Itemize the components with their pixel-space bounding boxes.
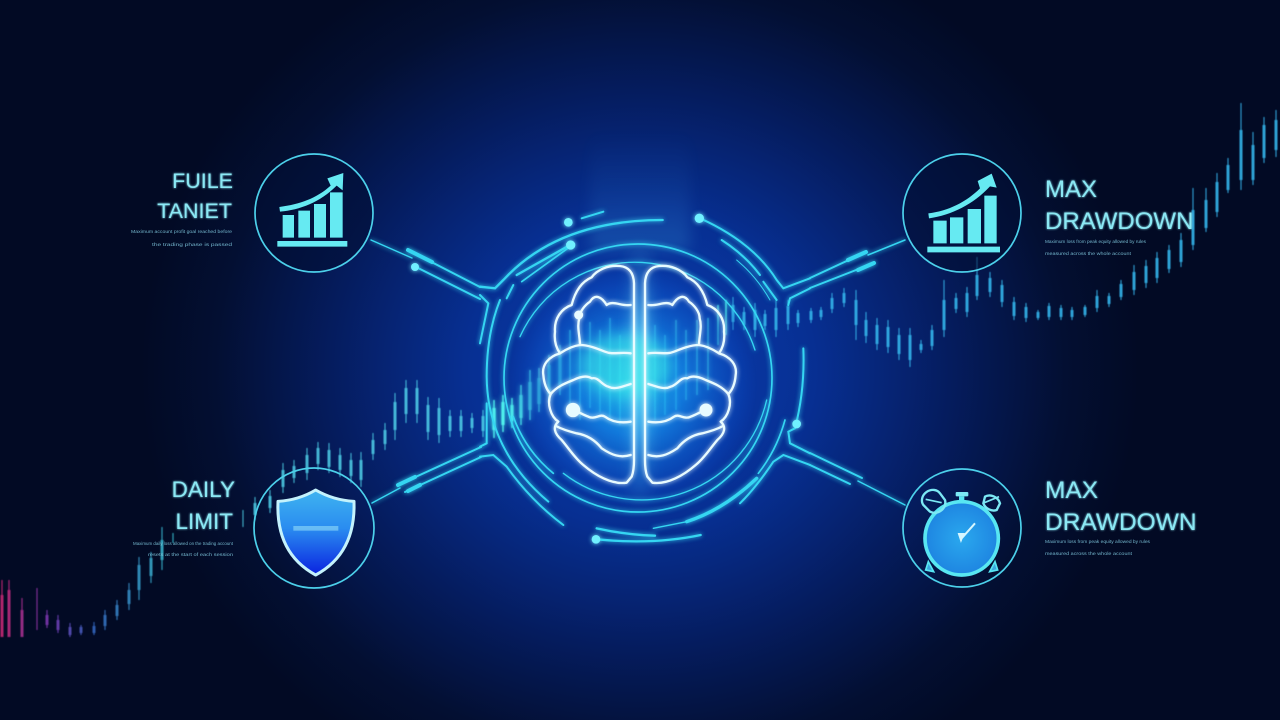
description lines: Maximum account profit goal reached before [131, 229, 232, 234]
icon ring [903, 154, 1021, 272]
ring arc lower [563, 400, 767, 500]
right side arc [788, 288, 810, 453]
circuit rings around brain [480, 212, 810, 544]
brain icon [543, 266, 736, 483]
node dots [564, 214, 801, 544]
bottom left arc [480, 455, 563, 525]
heading: daily limit [172, 477, 235, 534]
left hemisphere [543, 266, 634, 483]
heading: file target: TANIET [157, 199, 232, 223]
bottom right arcs [740, 455, 810, 503]
panel: file target (top left) [131, 154, 373, 272]
heading: max drawdown [1045, 477, 1197, 536]
connector: top right [810, 240, 905, 288]
ring arc upper [520, 262, 755, 350]
inner full ring [504, 244, 772, 512]
chart segment: rising left [243, 380, 483, 527]
heading: daily limit: LIMIT [175, 509, 233, 534]
heading: file target: FUILE [172, 169, 233, 193]
connector: bottom left [372, 447, 481, 503]
outer left arc [487, 300, 548, 502]
icon ring [903, 469, 1021, 587]
description lines [131, 229, 233, 247]
connector: top left [371, 240, 480, 299]
heading: max drawdown: MAX [1045, 176, 1097, 203]
outer top left arc [480, 220, 663, 288]
description lines [1045, 239, 1147, 256]
description lines: Maximum loss from peak equity allowed by rules [1045, 239, 1147, 244]
panel: daily limit (bottom left) [133, 468, 374, 588]
heading: daily limit: DAILY [172, 477, 235, 502]
heading: max drawdown: MAX [1045, 477, 1098, 504]
chart segment: through the centre [494, 300, 726, 438]
chart segment: lower left pink to cyan [2, 527, 173, 637]
icon ring [254, 468, 374, 588]
right hemisphere [645, 266, 736, 483]
bottom arcs [597, 528, 655, 536]
heading: max drawdown [1045, 176, 1193, 235]
icon: rising bar chart [927, 174, 1000, 252]
description lines [133, 541, 234, 557]
description lines: resets at the start of each session [148, 552, 234, 557]
brain core glow [505, 240, 771, 511]
icon: rising bar chart [277, 173, 347, 247]
description lines: Maximum loss from peak equity allowed by rules [1045, 539, 1151, 544]
description lines [1045, 539, 1151, 556]
ring arc lower left [513, 417, 553, 473]
connector: bottom right [810, 453, 905, 505]
icon: shield [278, 490, 354, 575]
heading: file target [157, 169, 233, 223]
description lines: measured across the whole account [1045, 551, 1133, 556]
outer top right arc [700, 218, 810, 288]
heading: max drawdown: DRAWDOWN [1045, 509, 1197, 536]
candlestick line chart [2, 103, 1276, 637]
panel: max drawdown (top right) [903, 154, 1193, 272]
icon ring [255, 154, 373, 272]
description lines: Maximum daily loss allowed on the trading account [133, 541, 234, 546]
panel: max drawdown (bottom right) [903, 469, 1197, 587]
description lines: measured across the whole account [1045, 251, 1132, 256]
heading: max drawdown: DRAWDOWN [1045, 208, 1193, 235]
chart segment: right [733, 103, 1276, 367]
icon: alarm clock [922, 490, 1000, 575]
description lines: the trading phase is passed [152, 242, 233, 247]
